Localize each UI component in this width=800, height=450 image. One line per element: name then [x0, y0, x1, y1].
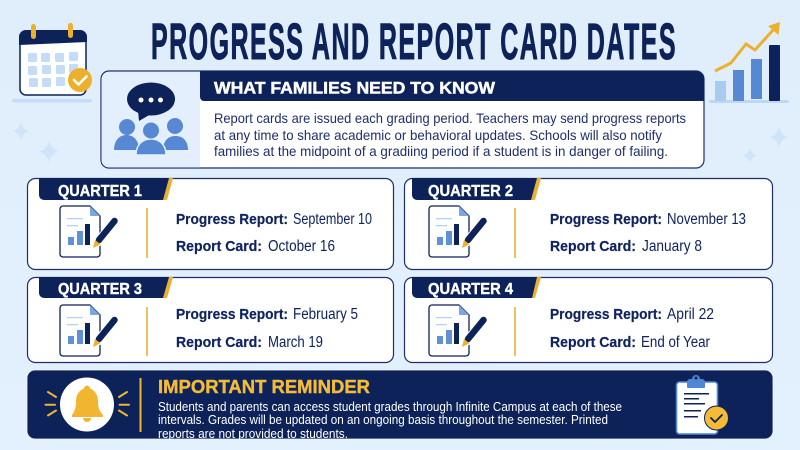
- tab: quarter 2: [412, 178, 541, 200]
- tab: quarter 4: [412, 277, 541, 298]
- divider: [514, 208, 516, 258]
- panel: quarter 1: [28, 178, 394, 270]
- dates: [176, 211, 372, 255]
- tab: quarter 3: [39, 277, 173, 298]
- dates: [550, 306, 714, 351]
- dates: March 19: [268, 334, 323, 351]
- dates: Report Card:: [550, 238, 636, 255]
- panel: quarter 4: [404, 277, 772, 362]
- divider: [140, 378, 142, 432]
- reminder body text: [158, 399, 622, 441]
- dates: November 13: [667, 211, 746, 228]
- icon: report and pencil: [60, 206, 114, 257]
- dates: January 8: [642, 238, 702, 255]
- panel: what families need to know: [101, 71, 704, 168]
- panel heading: WHAT FAMILIES NEED TO KNOW: [214, 78, 496, 98]
- dates: End of Year: [641, 334, 710, 351]
- panel: quarter 2: [404, 178, 772, 270]
- icon: report and pencil: [60, 305, 114, 356]
- divider: [146, 208, 148, 258]
- icon: calendar with check: [12, 23, 92, 102]
- icon: rising bar chart: [709, 22, 789, 103]
- panel: quarter 3: [28, 277, 394, 362]
- icon: report and pencil: [429, 206, 484, 257]
- dates: October 16: [268, 238, 335, 255]
- icon: clipboard with check: [676, 375, 728, 434]
- reminder body text: Students and parents can access student grades through Infinite Campus at each of these: [158, 399, 622, 414]
- icon: left sparkles: [13, 122, 59, 163]
- dates: Report Card:: [176, 334, 262, 351]
- reminder heading: IMPORTANT REMINDER: [158, 376, 370, 397]
- dates: Progress Report:: [176, 211, 288, 228]
- panel heading: [200, 71, 704, 101]
- dates: Report Card:: [550, 334, 636, 351]
- tab: quarter 1: [39, 178, 173, 200]
- tab: quarter 2: QUARTER 2: [428, 183, 513, 200]
- dates: [550, 211, 746, 255]
- panel: important reminder: [27, 370, 773, 441]
- panel body text: [214, 111, 686, 159]
- tab: quarter 4: QUARTER 4: [428, 281, 513, 298]
- dates: [176, 306, 358, 351]
- panel body text: families at the midpoint of a gradiing period if a student is in danger of failing.: [214, 144, 668, 159]
- dates: Report Card:: [176, 238, 262, 255]
- reminder body text: reports are not provided to students.: [158, 426, 348, 441]
- dates: Progress Report:: [176, 306, 288, 323]
- icon: right sparkles: [743, 126, 789, 163]
- dates: April 22: [667, 306, 714, 323]
- icon: report and pencil: [429, 305, 484, 356]
- tab: quarter 1: QUARTER 1: [58, 183, 142, 200]
- dates: Progress Report:: [550, 306, 662, 323]
- icon: bell: [46, 378, 129, 432]
- reminder body text: intervals. Grades will be updated on an ongoing basis throughout the semester. Printed: [158, 412, 608, 427]
- divider: [514, 307, 516, 356]
- dates: September 10: [293, 211, 372, 228]
- dates: February 5: [293, 306, 358, 323]
- icon: family conversation: [114, 82, 188, 155]
- panel body text: at any time to share academic or behavioral updates. Schools will also notify: [214, 128, 662, 143]
- panel body text: Report cards are issued each grading period. Teachers may send progress reports: [214, 111, 686, 126]
- dates: Progress Report:: [550, 211, 662, 228]
- tab: quarter 3: QUARTER 3: [58, 281, 142, 298]
- divider: [146, 307, 148, 356]
